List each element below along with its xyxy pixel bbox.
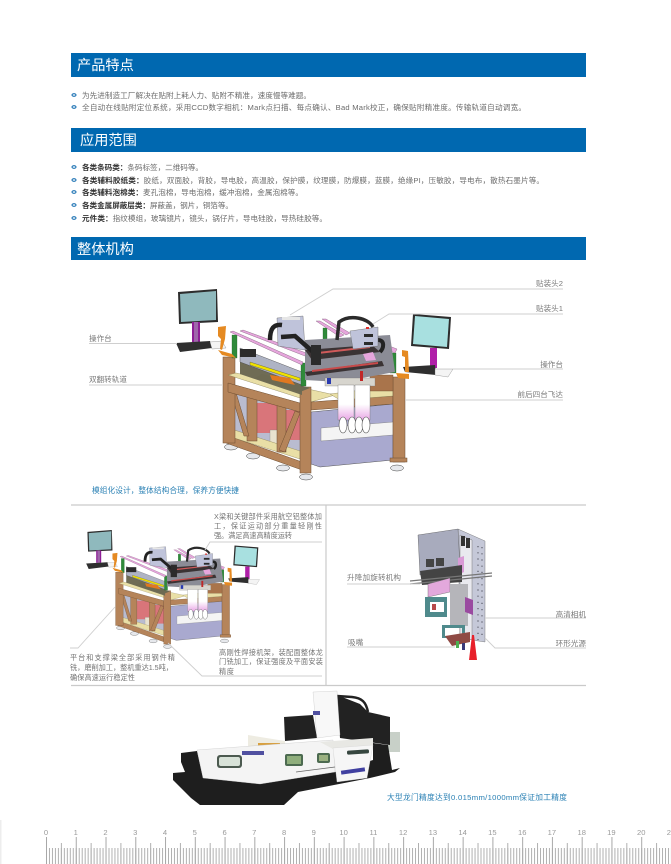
leader lines and labels: overall machine: 贴装头1	[536, 303, 563, 313]
callouts: placement head labels: 吸嘴	[348, 637, 364, 647]
leader lines and labels: overall machine	[89, 278, 563, 400]
placement head 1	[337, 318, 373, 340]
callouts: small machine notes: 门铣加工，保证强度及平面安装	[219, 657, 323, 666]
panel frame: detail panels	[71, 505, 586, 686]
feet	[224, 444, 238, 450]
ruler: 2	[103, 828, 108, 837]
callouts: placement head labels	[347, 572, 586, 648]
callouts: placement head labels: 环形光源	[556, 638, 586, 648]
ruler: 20	[637, 828, 645, 837]
callouts: small machine notes: 平台和支撑梁全部采用钢件精	[70, 653, 175, 662]
ruler: 11	[369, 828, 377, 837]
ruler: 7	[252, 828, 256, 837]
ruler: 6	[222, 828, 227, 837]
ruler: 0	[44, 828, 48, 837]
text block: application range: 各类金属屏蔽层类：屏蔽盖，钢片，铜箔等。	[82, 200, 233, 210]
callouts: small machine notes	[70, 512, 323, 682]
leader lines and labels: overall machine: 贴装头2	[536, 278, 563, 288]
frame top beams	[228, 373, 335, 402]
heading: 整体机构	[71, 237, 586, 260]
text block: product features: 为先进制造工厂解决在贴附上耗人力、贴附不精准，速度慢等难题。	[82, 90, 311, 100]
green posts	[232, 335, 237, 358]
ruler: 5	[193, 828, 197, 837]
text block: product features	[72, 90, 526, 112]
gantry rail body	[240, 358, 302, 395]
illustration: small machine	[86, 530, 260, 648]
left console	[178, 289, 218, 324]
mid structure	[305, 335, 395, 382]
ruler: 17	[548, 828, 556, 837]
ruler: 18	[577, 828, 586, 837]
leader lines and labels: overall machine: 前后四台飞达	[517, 389, 563, 399]
pink rails	[230, 331, 303, 365]
text block: product features: 全自动在线贴附定位系统，采用CCD数字相机：Mark点扫描、每点确认、Bad Mark校正，确保贴附精准度。传输轨道自动调宽。	[82, 102, 526, 112]
illustration: placement head detail	[410, 529, 492, 660]
text block: application range	[72, 162, 544, 223]
placement head 2	[277, 316, 305, 350]
ruler: 19	[607, 828, 616, 837]
right console	[411, 314, 451, 349]
text block: application range: 各类辅料泡棉类：麦孔泡棉，导电泡棉，缓冲泡棉，金属泡棉等。	[82, 187, 303, 197]
lavender base cabinet	[311, 404, 393, 467]
illustration: gantry milling machine	[173, 691, 400, 805]
callouts: small machine notes: 精度	[219, 667, 234, 676]
callouts: small machine notes: 高刚性焊接机架，装配面整体龙	[219, 648, 323, 657]
heading: 产品特点	[71, 53, 586, 77]
ruler: 14	[458, 828, 467, 837]
nozzle rings	[339, 417, 347, 433]
text block: application range: 各类辅料胶纸类：胶纸，双面胶，背胶，导电胶，高温胶，保护膜，纹理膜，防爆膜，蓝膜，绝缘PI，压敏胶，导电布，散热石墨片等。	[82, 175, 544, 185]
nozzle cylinders	[325, 378, 375, 386]
callouts: small machine notes: 铣，磨削加工，整机重达1.5吨，	[70, 663, 173, 672]
text block: application range: 各类条码类：条码标签，二维码等。	[82, 162, 203, 172]
ruler: 3	[133, 828, 137, 837]
caption: modular design: 模组化设计，整体结构合理，保养方便快捷	[92, 485, 239, 495]
leader lines and labels: overall machine: 操作台	[540, 359, 563, 369]
ruler: 8	[282, 828, 286, 837]
ruler: 13	[429, 828, 437, 837]
heading: 应用范围	[71, 128, 586, 152]
ruler: 16	[518, 828, 526, 837]
ruler: 15	[488, 828, 497, 837]
leader lines and labels: overall machine: 双翻转轨道	[89, 374, 127, 384]
ruler: 12	[399, 828, 407, 837]
heading: 应用范围: 应用范围	[80, 132, 137, 149]
callouts: small machine notes: X梁和关键部件采用航空铝整体加	[214, 512, 322, 521]
ruler	[0, 820, 671, 864]
callouts: small machine notes: 确保高速运行稳定性	[70, 673, 135, 682]
callouts: placement head labels: 高清相机	[556, 609, 586, 619]
red light cone	[469, 635, 477, 660]
heading: 整体机构: 整体机构	[77, 242, 134, 258]
ruler: 9	[312, 828, 316, 837]
text block: application range: 元件类：指纹模组，玻璃镜片，镜头，锅仔片，导电硅胶，导热硅胶等。	[82, 213, 327, 223]
callouts: placement head labels: 升降加旋转机构	[347, 572, 401, 582]
caption: gantry precision: 大型龙门精度达到0.015mm/1000mm保证加工精度	[387, 792, 567, 802]
interior back panel	[235, 385, 300, 455]
frame posts	[247, 392, 257, 441]
heading: 产品特点: 产品特点	[77, 58, 134, 74]
illustration: overall machine	[176, 289, 453, 480]
callouts: small machine notes: 工，保证运动部分重量轻刚性	[214, 522, 322, 530]
frame lower beams	[226, 435, 302, 470]
ruler: 4	[163, 828, 167, 837]
callouts: small machine notes: 强。满足高速高精度运转	[214, 531, 292, 540]
ruler: 1	[74, 828, 78, 837]
leader lines and labels: overall machine: 操作台	[89, 333, 112, 343]
ruler: 10	[339, 828, 348, 837]
pink panels	[257, 403, 278, 433]
